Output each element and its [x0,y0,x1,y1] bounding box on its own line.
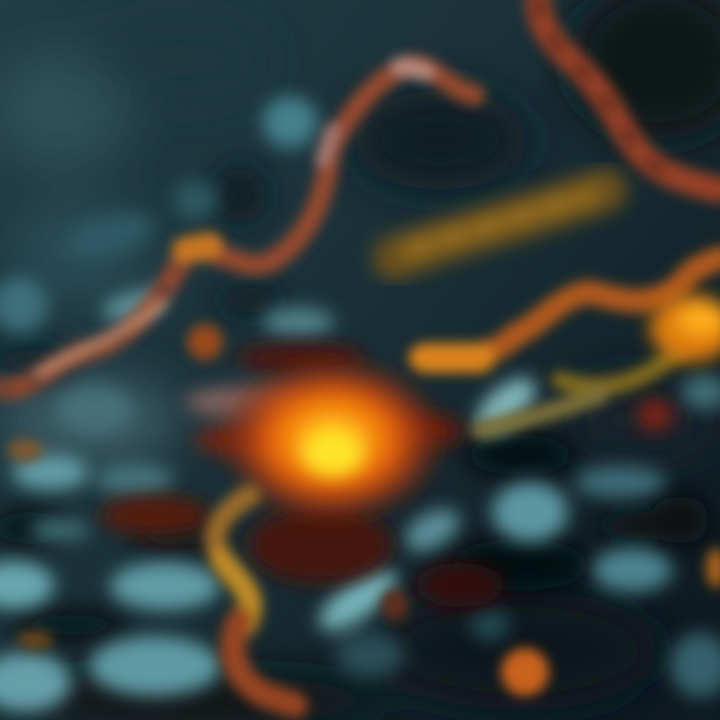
central glowing core [217,355,447,525]
gold speckled band [395,190,605,258]
dark red bands [100,344,673,607]
upper left orange streak [0,65,475,389]
orange blobs [7,324,720,696]
black gaps between pebbles [0,167,710,637]
lower yellow-orange streak [216,495,295,705]
middle right orange streak [420,258,720,430]
right edge glow [650,294,720,362]
upper right red-orange streak [538,0,720,190]
